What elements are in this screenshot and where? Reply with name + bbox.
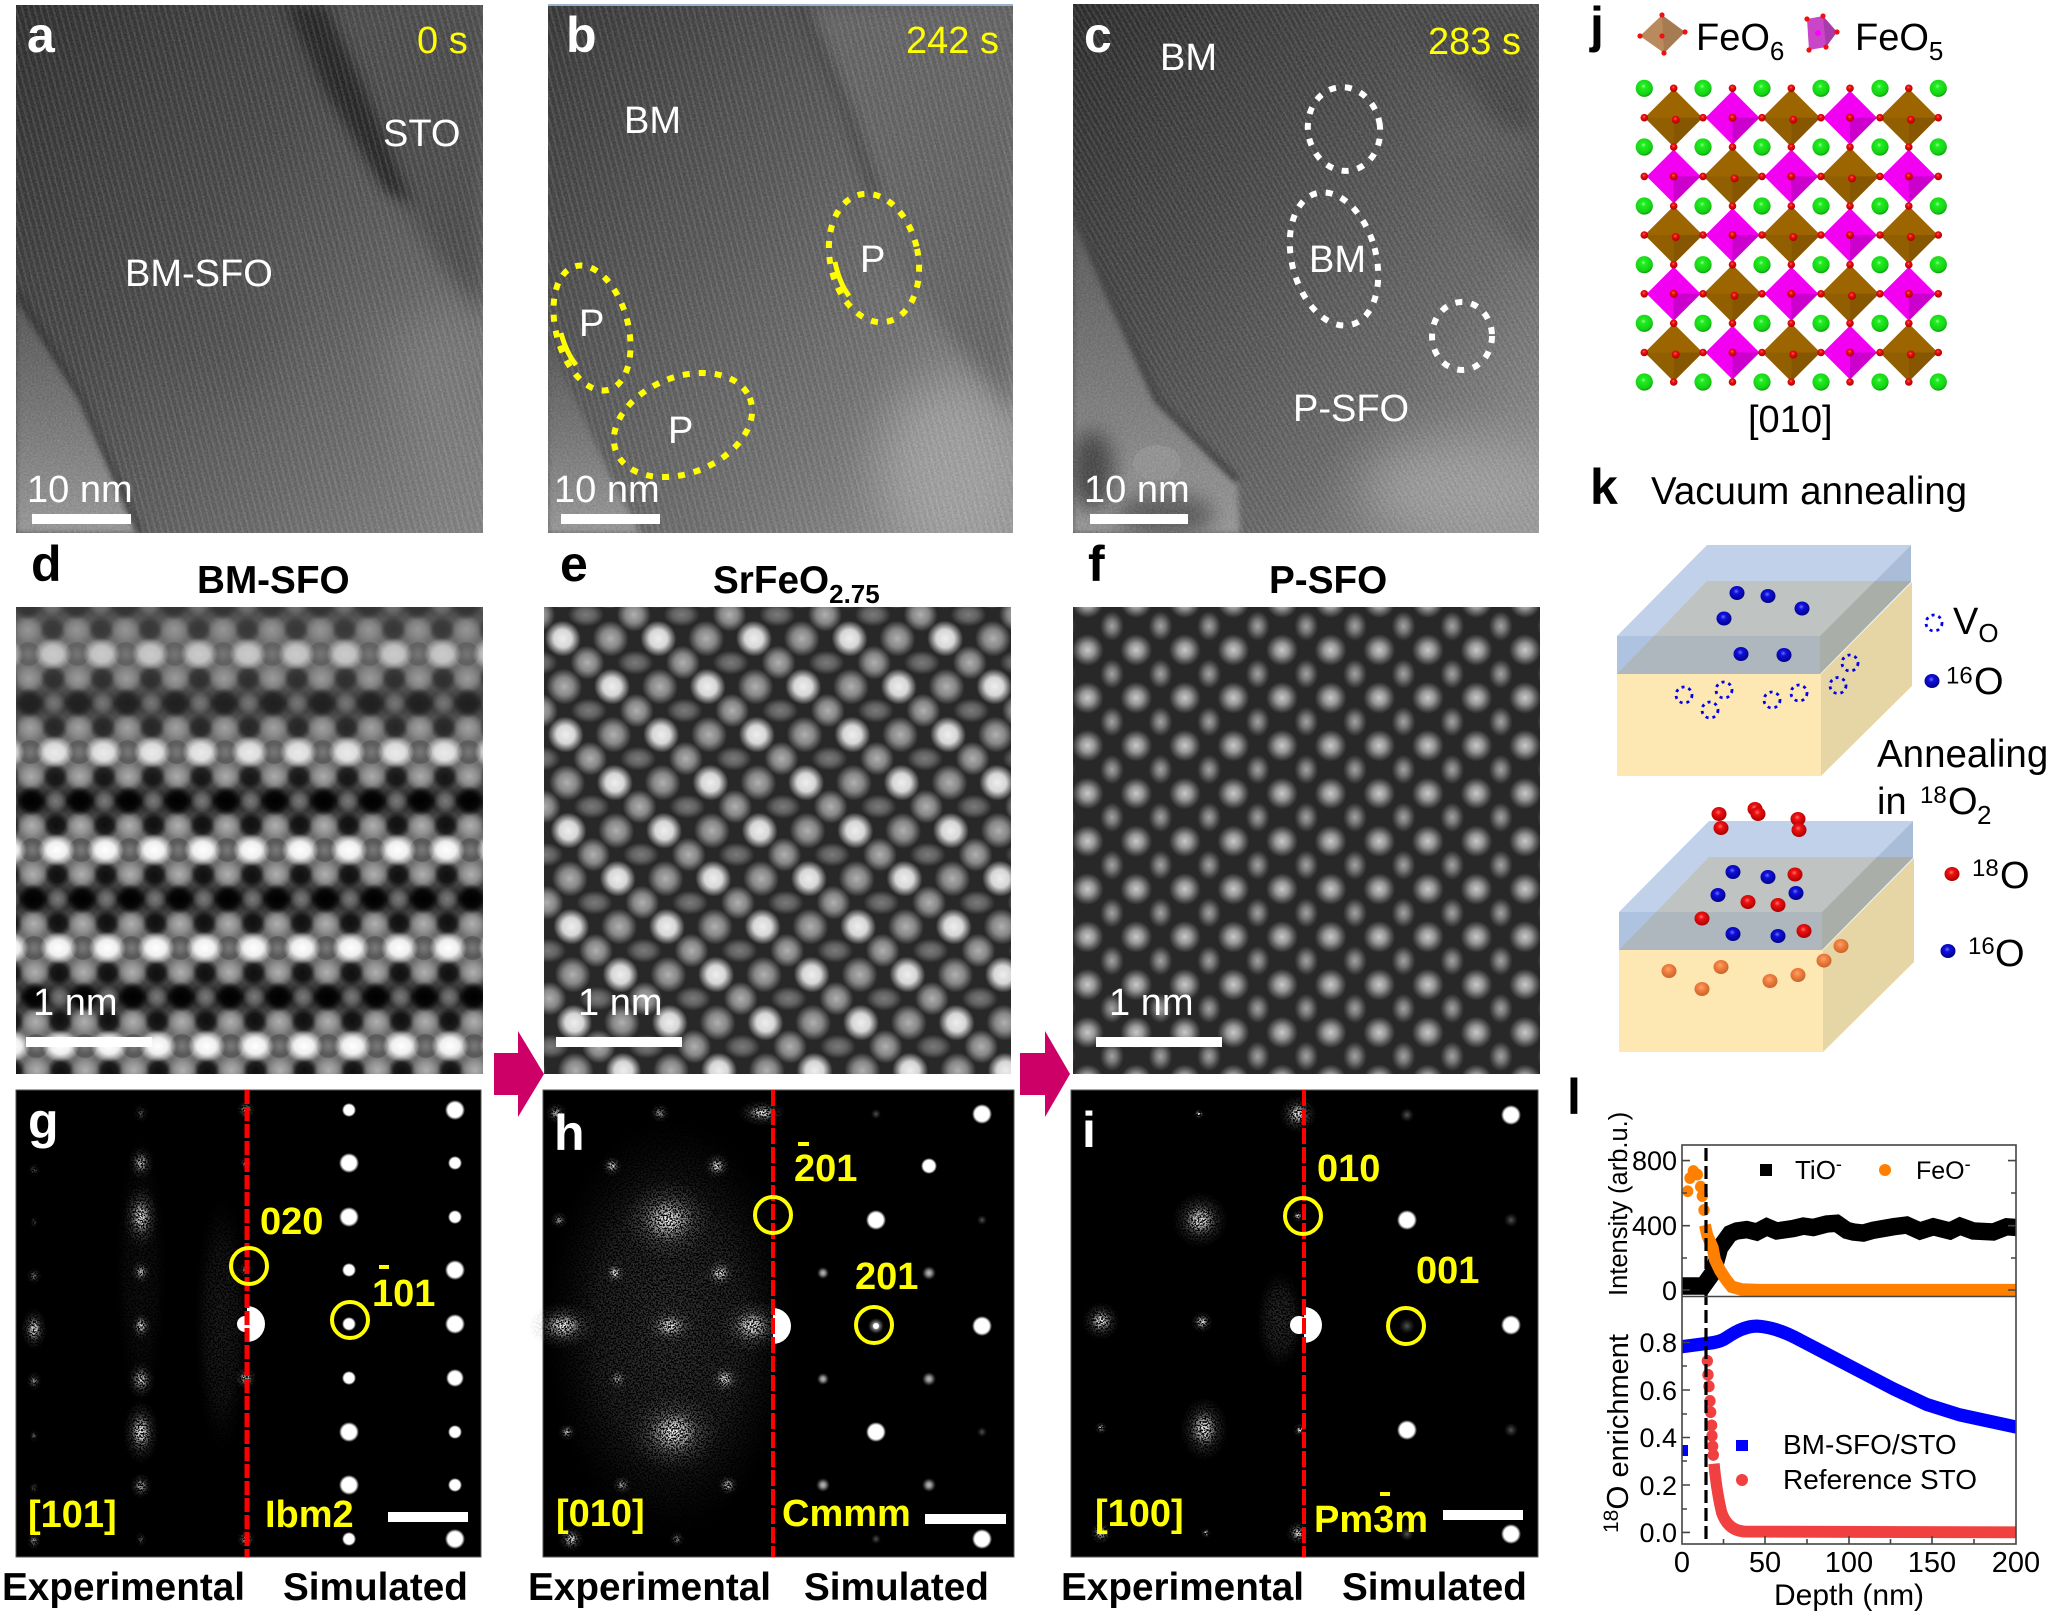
simulated spots h (773, 1104, 992, 1549)
panel l: depth profile charts (1567, 1069, 2040, 1612)
label a: a (27, 7, 56, 63)
label Annealing in 18O2 (1877, 733, 2048, 830)
zone axis [101]: [101] (28, 1494, 117, 1536)
BM region right (1432, 302, 1492, 370)
scale bar (556, 1037, 682, 1047)
legend FeO-: - (1965, 1154, 1971, 1174)
scale bar (1443, 1510, 1523, 1520)
transformed region left (541, 257, 643, 399)
scale label 1 nm: 1 nm (33, 982, 117, 1024)
arrow e to f (1020, 1031, 1070, 1117)
label d: d (31, 536, 62, 592)
caption Simulated h: Simulated (804, 1566, 989, 1609)
label c: c (1084, 7, 1112, 63)
y axis title enrichment: enrichment (1603, 1334, 1635, 1478)
label g: g (28, 1093, 59, 1149)
space group Ibm2: Ibm2 (265, 1494, 354, 1536)
caption Experimental g: Experimental (2, 1566, 245, 1609)
legend FeO5: 5 (1929, 36, 1943, 66)
caption Experimental h: Experimental (528, 1566, 771, 1609)
transformed region right: P (860, 239, 885, 281)
caption Simulated i: Simulated (1342, 1566, 1527, 1609)
heading Vacuum annealing: Vacuum annealing (1651, 470, 1967, 513)
indexed spot 010: 010 (1317, 1148, 1380, 1190)
zone axis [100]: [100] (1095, 1493, 1184, 1535)
y axis title intensity: Intensity (arb.u.) (1605, 1112, 1633, 1296)
legend FeO-: FeO (1916, 1157, 1965, 1185)
panel b: TEM 242 s (541, 4, 1020, 560)
transformed region left: P (579, 303, 604, 345)
arrow d to e (494, 1031, 544, 1117)
simulated spots i (1290, 1105, 1521, 1544)
legend BM-SFO/STO: BM-SFO/STO (1783, 1429, 1957, 1460)
indexed spot 001 (1388, 1250, 1479, 1344)
legend Reference STO: Reference STO (1783, 1464, 1977, 1495)
legend 18O (1944, 855, 2030, 897)
simulated spots g (237, 1100, 465, 1549)
crystal lattice (1636, 80, 1947, 391)
label Annealing in 18O2: 2 (1977, 800, 1991, 830)
BM region centre (1276, 182, 1392, 336)
legend TiO-: - (1836, 1154, 1842, 1174)
heading SrFeO2.75: SrFeO (713, 559, 829, 602)
y ticks enrichment: 0.0 (1639, 1518, 1677, 1548)
legend 18O: O (2000, 855, 2030, 897)
legend 16O top: 16 (1946, 662, 1973, 690)
x ticks: 150 (1908, 1547, 1956, 1579)
label Annealing in 18O2: 18 (1920, 782, 1947, 809)
series FeO- (1682, 1165, 2017, 1290)
scale label 10 nm: 10 nm (27, 469, 133, 511)
time 0 s: 0 s (417, 20, 468, 62)
experimental spots g (21, 1101, 257, 1550)
legend 16O bottom: O (1995, 933, 2025, 975)
time 242 s: 242 s (906, 20, 999, 62)
heading BM-SFO: BM-SFO (197, 559, 350, 602)
y axis title enrichment: 18 (1600, 1510, 1623, 1533)
divider h (771, 1090, 775, 1557)
y ticks enrichment: 0.8 (1639, 1328, 1677, 1358)
x ticks: 0 (1674, 1547, 1690, 1579)
space group Pm-3m: Pm3m (1314, 1499, 1428, 1541)
series BM-SFO/STO (1680, 1326, 2017, 1427)
label k: k (1590, 459, 1618, 515)
heading SrFeO2.75: 2.75 (829, 579, 880, 609)
scale bar (388, 1512, 468, 1522)
legend 18O: 18 (1972, 855, 1999, 882)
series TiO- (1680, 1223, 2017, 1286)
legend blue marker clipped (1682, 1445, 1688, 1456)
scale bar (26, 1037, 152, 1047)
zone axis [010]: [010] (556, 1493, 645, 1535)
x ticks (1674, 1547, 2040, 1579)
scale bar (925, 1514, 1006, 1524)
BM region top (1301, 81, 1387, 177)
y ticks enrichment: 0.2 (1639, 1471, 1677, 1501)
label P-SFO: P-SFO (1293, 388, 1409, 430)
legend FeO6: FeO (1696, 17, 1770, 59)
indexed spot 201: 201 (855, 1256, 918, 1298)
transformed region bottom: P (668, 410, 693, 452)
indexed spot -101: 101 (372, 1273, 435, 1315)
chart data (clipped) (1680, 1165, 2017, 1532)
zone axis [010]: [010] (1748, 399, 1833, 441)
caption Experimental i: Experimental (1061, 1566, 1304, 1609)
label h: h (554, 1105, 585, 1161)
indexed spot -201 (755, 1142, 857, 1233)
scale bar (32, 514, 131, 524)
y ticks enrichment: 0.6 (1639, 1376, 1677, 1406)
legend 16O bottom: 16 (1968, 933, 1995, 960)
indexed spot 020 (231, 1201, 323, 1284)
y ticks intensity: 400 (1632, 1211, 1677, 1241)
indexed spot -201: 201 (794, 1148, 857, 1190)
legend 16O top (1924, 661, 2004, 703)
y axis title enrichment: O (1600, 1486, 1635, 1510)
label BM-SFO: BM-SFO (125, 253, 273, 295)
panel i: diffraction Pm-3m (1071, 1090, 1538, 1557)
divider g (244, 1090, 250, 1557)
icon: FeO5 pyramid (1804, 13, 1840, 53)
label l: l (1567, 1069, 1581, 1125)
block: vacuum annealing (1617, 545, 1912, 776)
label Annealing in 18O2: in (1877, 781, 1907, 823)
x ticks: 200 (1992, 1547, 2040, 1579)
experimental spots i (1082, 1095, 1317, 1545)
label e: e (560, 536, 588, 592)
panel h: diffraction Cmmm (529, 1090, 1014, 1557)
scale label 10 nm: 10 nm (554, 469, 660, 511)
time 283 s: 283 s (1428, 21, 1521, 63)
panel c: TEM 283 s (1070, 4, 1560, 540)
experimental spots h (529, 1100, 795, 1552)
label i: i (1082, 1102, 1096, 1158)
scale bar (561, 514, 660, 524)
label f: f (1088, 536, 1105, 592)
legend VO: V (1953, 601, 1978, 643)
y ticks enrichment (1639, 1328, 1677, 1548)
indexed spot 201 (855, 1256, 918, 1343)
BM region centre: BM (1309, 239, 1366, 281)
legend 16O bottom (1940, 933, 2025, 975)
axes frame (1682, 1145, 2016, 1544)
y ticks intensity: 800 (1632, 1146, 1677, 1176)
series Reference STO (1702, 1355, 2017, 1532)
indexed spot 001: 001 (1416, 1250, 1479, 1292)
y ticks enrichment: 0.4 (1639, 1423, 1677, 1453)
top edge line (548, 4, 1013, 6)
caption Simulated g: Simulated (283, 1566, 468, 1609)
legend FeO6: 6 (1770, 36, 1784, 66)
label Annealing in 18O2: Annealing (1877, 733, 2048, 776)
label BM: BM (624, 100, 681, 142)
transformed region bottom (598, 354, 768, 496)
panel j: crystal structure (1589, 0, 1947, 441)
panel g: diffraction Ibm2 (16, 1090, 481, 1557)
panel k: annealing schematic (1590, 459, 2048, 1052)
divider i (1302, 1090, 1306, 1557)
dashed interface line (1704, 1148, 1708, 1540)
heading P-SFO: P-SFO (1269, 559, 1387, 602)
label BM top: BM (1160, 37, 1217, 79)
atomic lattice e (544, 607, 1011, 1074)
indexed spot 020: 020 (260, 1201, 323, 1243)
indexed spot -101 (332, 1265, 435, 1338)
scale label 1 nm: 1 nm (578, 982, 662, 1024)
panel e: SrFeO2.75 atomic image (544, 536, 1011, 1074)
scale label 1 nm: 1 nm (1109, 982, 1193, 1024)
panel d: BM-SFO atomic image (16, 536, 483, 1074)
icon: FeO6 octahedron (1637, 12, 1688, 56)
label Annealing in 18O2: O (1948, 781, 1978, 823)
atomic lattice d (16, 607, 483, 1074)
scale bar (1090, 514, 1188, 524)
y ticks intensity: 0 (1662, 1276, 1677, 1306)
block: annealing in 18O2 (1619, 802, 1914, 1052)
legend FeO- (1879, 1154, 1971, 1185)
legend VO: O (1978, 618, 1999, 648)
legend FeO5: FeO (1855, 17, 1929, 59)
transformed region right (817, 185, 931, 331)
panel f: P-SFO atomic image (1073, 536, 1540, 1074)
legend TiO-: TiO (1795, 1155, 1836, 1185)
space group Cmmm: Cmmm (782, 1493, 911, 1535)
x ticks: 50 (1749, 1547, 1781, 1579)
x ticks: 100 (1825, 1547, 1873, 1579)
legend 16O top: O (1974, 661, 2004, 703)
legend VO (1926, 601, 1999, 648)
panel a: TEM 0 s (16, 5, 483, 533)
scale label 10 nm: 10 nm (1084, 469, 1190, 511)
y ticks intensity (1632, 1146, 1677, 1306)
atomic lattice f (1073, 607, 1540, 1074)
scale bar (1096, 1037, 1222, 1047)
x axis title: Depth (nm) (1774, 1579, 1924, 1612)
legend TiO- (1760, 1154, 1842, 1185)
label STO: STO (383, 113, 460, 155)
label b: b (566, 7, 597, 63)
indexed spot 010 (1285, 1148, 1380, 1234)
